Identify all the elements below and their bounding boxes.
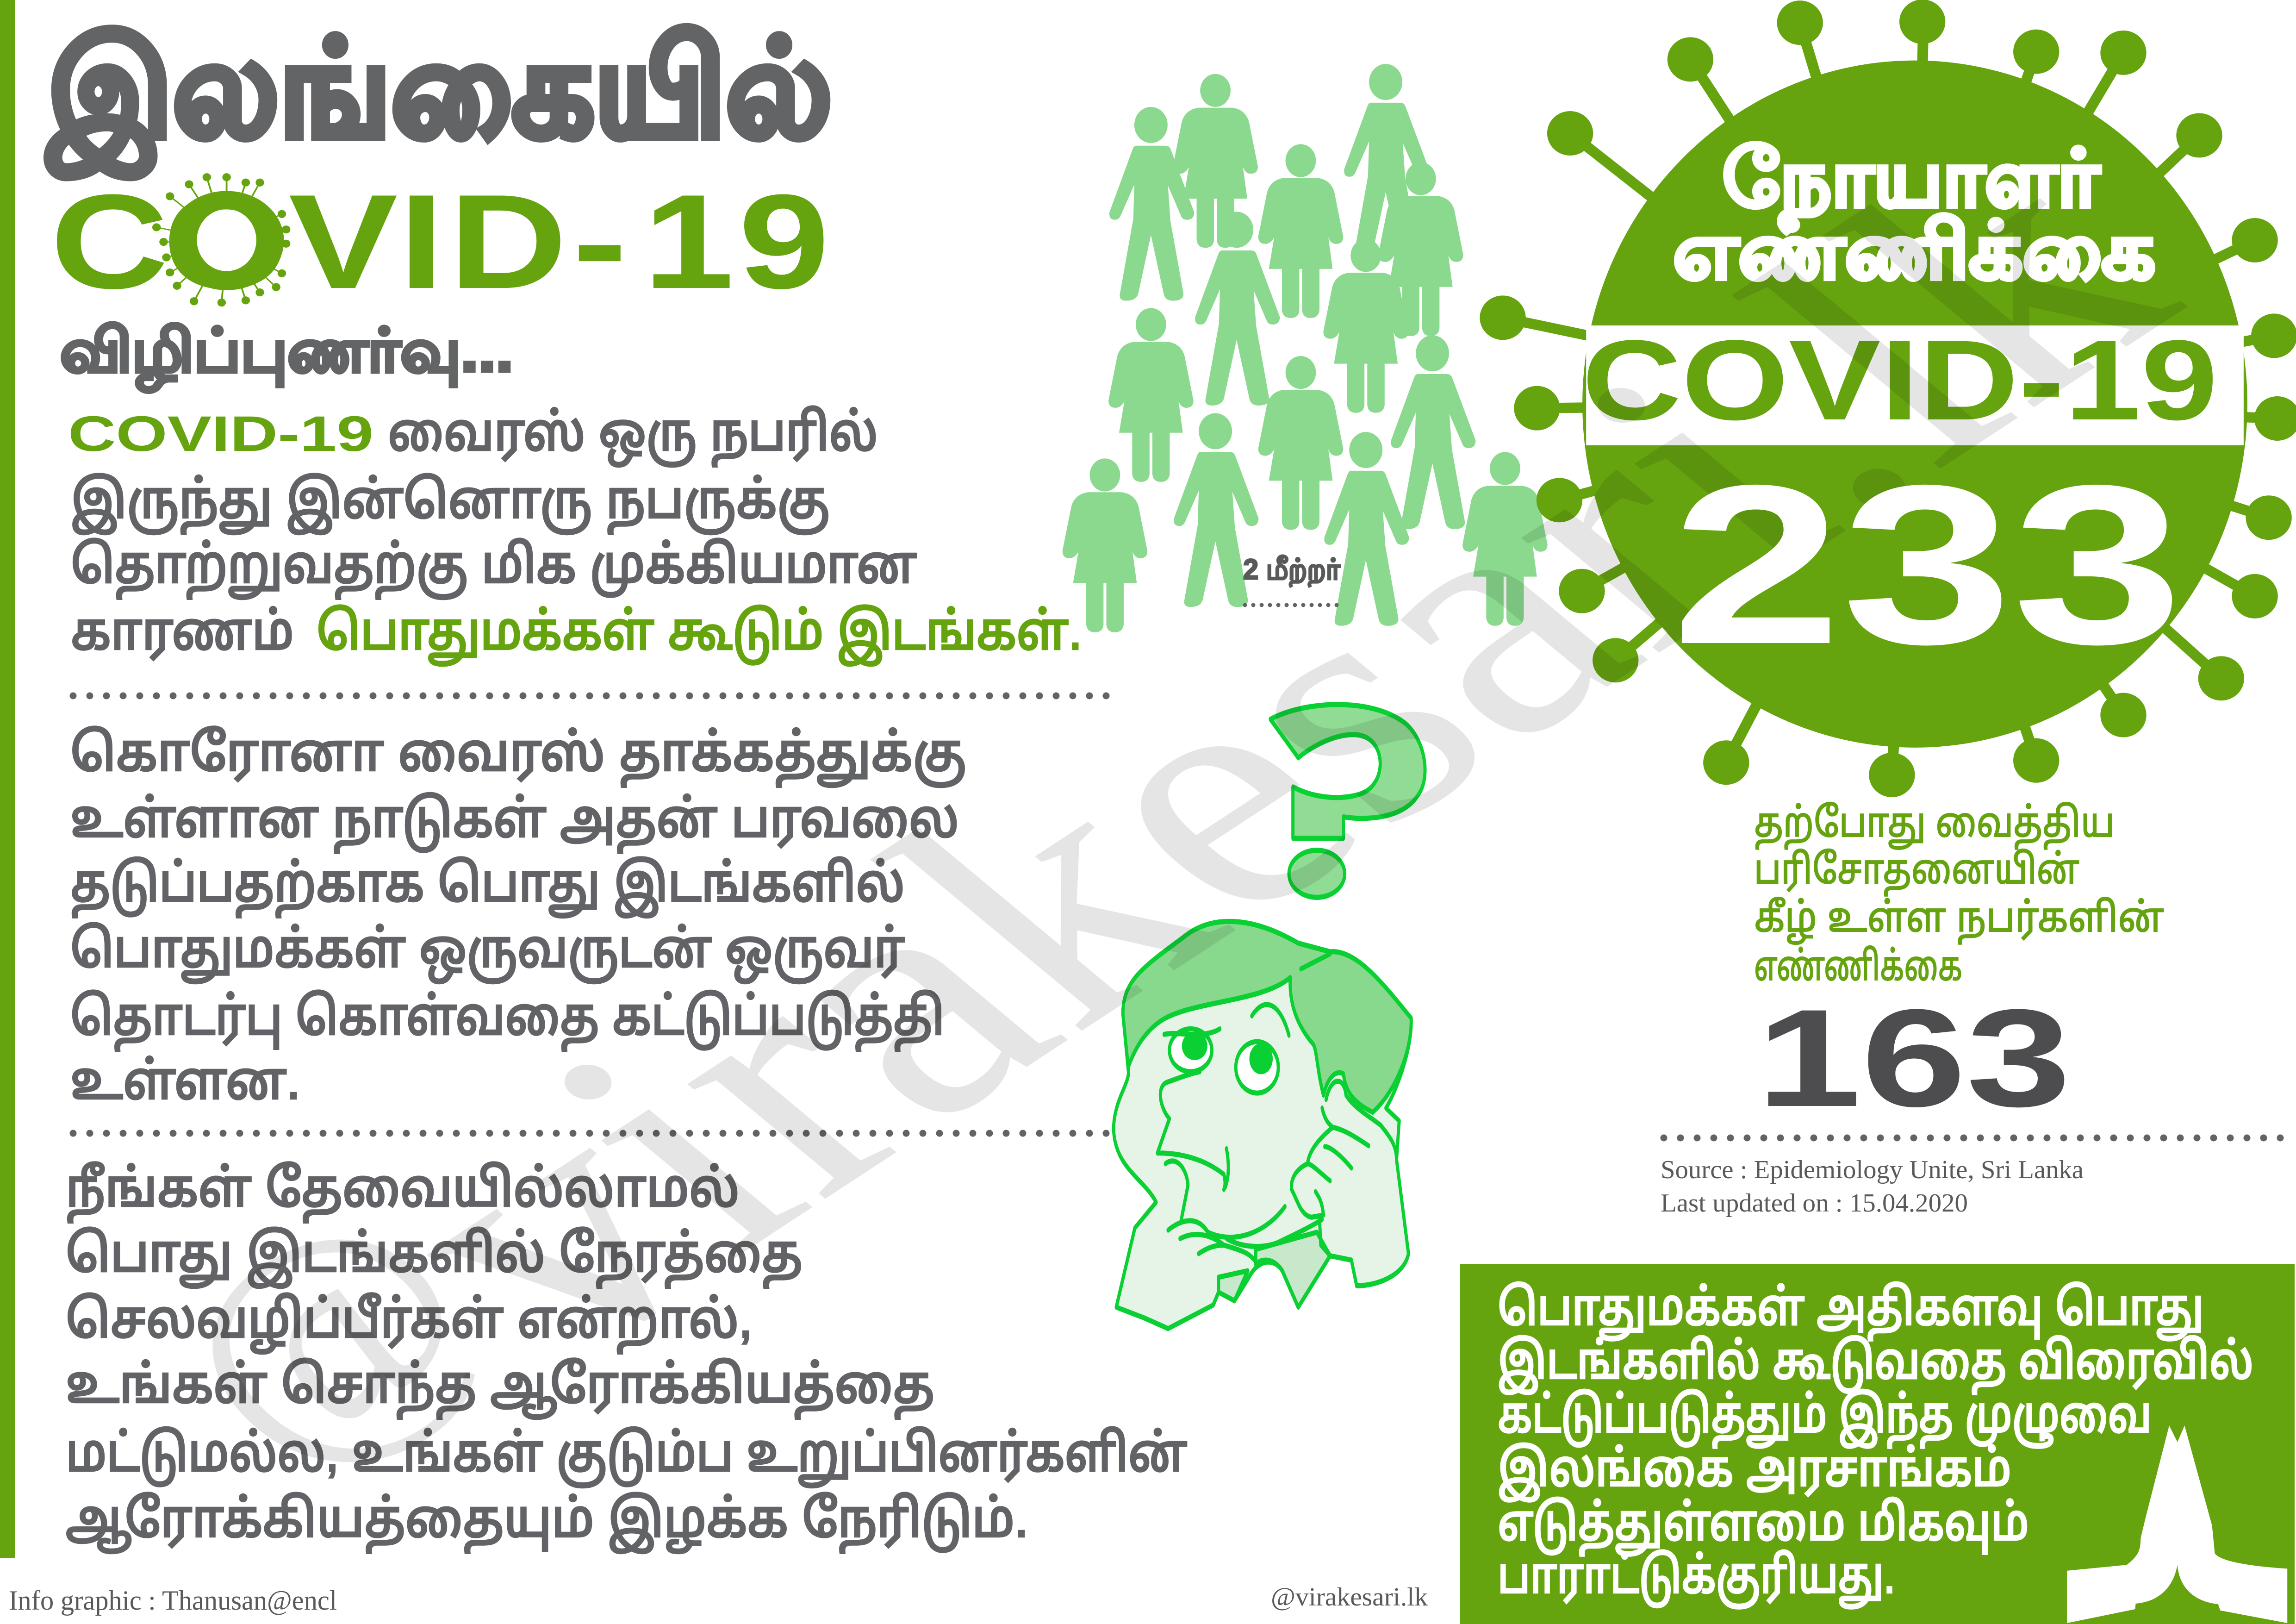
eyes xyxy=(1170,1029,1278,1093)
panel text: பாராட்டுக்குரியது. xyxy=(1498,1547,1895,1609)
source note: Last updated on : 15.04.2020 xyxy=(1661,1189,1968,1218)
text block: restrictions xyxy=(70,724,966,1110)
icon: thinking man and question mark xyxy=(1114,705,1425,1329)
text block: transmission: பொதுமக்கள் கூடும் இடங்கள். xyxy=(317,602,1082,666)
text: under medical observation: எண்ணிக்கை xyxy=(1754,943,1962,989)
icon: praying hands xyxy=(2067,1425,2287,1623)
watermark: virakesari.lk xyxy=(297,84,2253,1424)
text block: restrictions: உள்ளன. xyxy=(70,1052,300,1110)
text block: transmission: காரணம் xyxy=(71,602,294,660)
credit: Info graphic : Thanusan@encl xyxy=(9,1585,337,1616)
band label: COVID-19 xyxy=(1582,317,2218,444)
text block: warning: உங்கள் சொந்த ஆரோக்கியத்தை xyxy=(66,1355,934,1419)
face lines xyxy=(1157,954,1397,1260)
panel text: கட்டுப்படுத்தும் இந்த முழுவை xyxy=(1498,1387,2152,1448)
face and hands xyxy=(1114,921,1411,1329)
text: under medical observation: பரிசோதனையின் xyxy=(1754,846,2079,897)
text block: warning: நீங்கள் தேவையில்லாமல் xyxy=(66,1159,740,1223)
text block: restrictions: பொதுமக்கள் ஒருவருடன் ஒருவர் xyxy=(70,920,905,983)
subtitle: awareness: விழிப்புணர்வு... xyxy=(60,317,513,393)
number: under observation: 163 xyxy=(1756,980,2071,1136)
text block: warning: செலவழிப்பீர்கள் என்றால், xyxy=(66,1290,753,1354)
handle: @virakesari.lk xyxy=(1271,1583,1428,1612)
icon: question mark xyxy=(1270,705,1425,897)
text block: warning: மட்டுமல்ல, உங்கள் குடும்ப உறுப்பினர்களின் xyxy=(66,1424,1187,1487)
heading: patient count: நோயாளர் xyxy=(1723,135,2100,234)
text block: transmission: COVID-19 xyxy=(68,406,373,462)
icon: small virus xyxy=(152,173,290,306)
watermark: @ xyxy=(87,1162,554,1510)
title: Sri Lanka: இலங்கையில் xyxy=(46,14,832,179)
text block: transmission: இருந்து இன்னொரு நபருக்கு xyxy=(71,471,830,534)
virus badge: patient count xyxy=(1480,0,2296,797)
text block: restrictions: கொரோனா வைரஸ் தாக்கத்துக்கு xyxy=(70,724,966,787)
text block: warning: ஆரோக்கியத்தையும் இழக்க நேரிடும். xyxy=(66,1490,1028,1553)
text block: transmission: தொற்றுவதற்கு மிக முக்கியமான xyxy=(71,536,917,599)
icon: large virus xyxy=(1480,0,2296,797)
left accent bar xyxy=(0,0,15,1558)
text: under medical observation xyxy=(1754,800,2164,989)
text block: restrictions: உள்ளான நாடுகள் அதன் பரவலை xyxy=(70,790,959,853)
number: total cases: 233 xyxy=(1671,437,2183,691)
panel text xyxy=(1498,1279,2253,1609)
text block: transmission xyxy=(68,403,1082,666)
shirt collar xyxy=(1256,1232,1330,1307)
virus badge: patient count: எண்ணிக்கை xyxy=(1673,207,2155,295)
panel text: இலங்கை அரசாங்கம் xyxy=(1498,1440,2011,1502)
text block: warning xyxy=(66,1159,1187,1553)
text: under medical observation: தற்போது வைத்திய xyxy=(1754,800,2115,850)
title: COVID-19 with virus O: COVID-19 xyxy=(50,166,830,317)
text block: transmission: வைரஸ் ஒரு நபரில் xyxy=(388,403,878,467)
source note xyxy=(1661,1156,2084,1218)
source note: Source : Epidemiology Unite, Sri Lanka xyxy=(1661,1156,2084,1184)
text: under medical observation: கீழ் உள்ள நபர்களின் xyxy=(1754,894,2164,945)
hair xyxy=(1123,921,1411,1112)
label: 2 metres: 2 மீற்றர் xyxy=(1243,554,1341,587)
panel: government praise xyxy=(1460,1264,2295,1624)
text block: warning: பொது இடங்களில் நேரத்தை xyxy=(66,1224,803,1288)
text block: restrictions: தொடர்பு கொள்வதை கட்டுப்படுத்தி xyxy=(70,987,945,1051)
panel text: எடுத்துள்ளமை மிகவும் xyxy=(1498,1494,2029,1556)
text block: restrictions: தடுப்பதற்காக பொது இடங்களில் xyxy=(70,854,905,918)
panel text: பொதுமக்கள் அதிகளவு பொது xyxy=(1498,1279,2204,1341)
people crowd xyxy=(1063,64,1548,632)
